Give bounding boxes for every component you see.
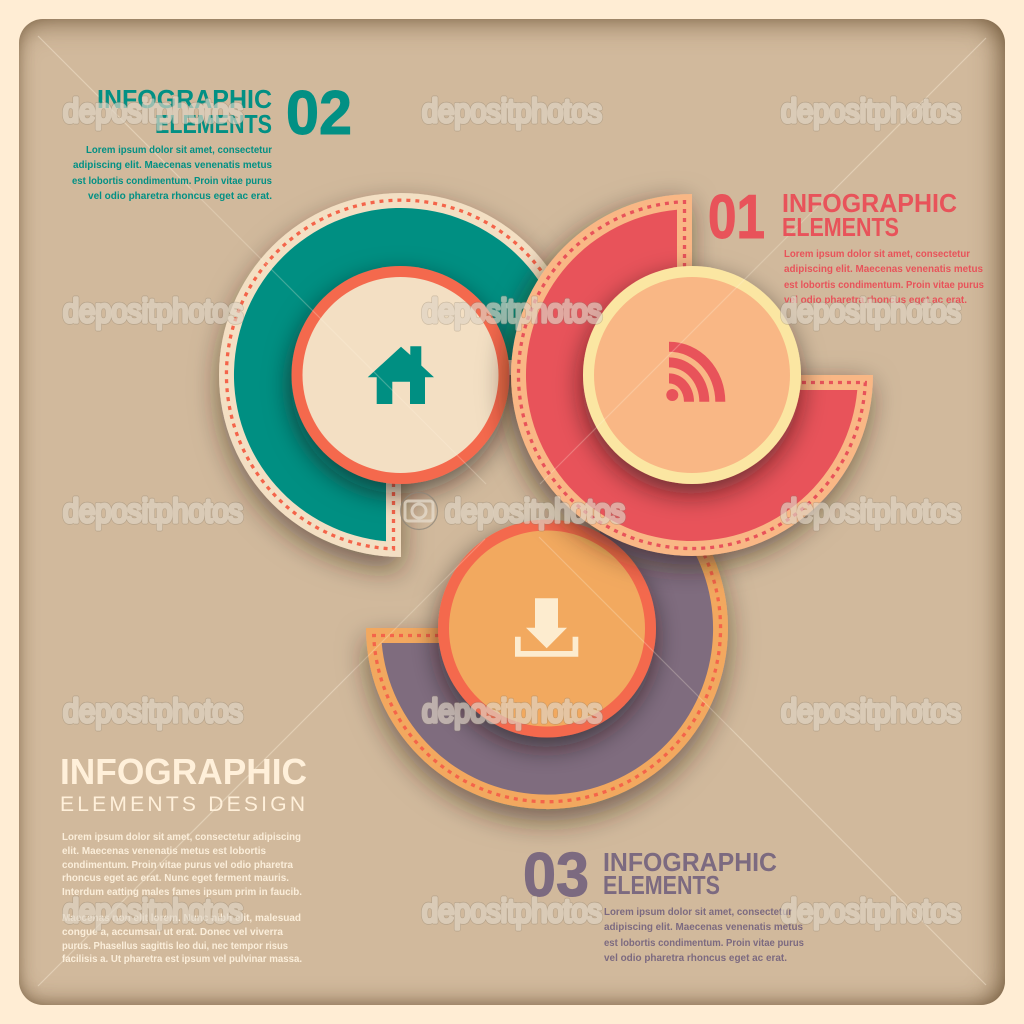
paragraph 01: adipiscing elit. Maecenas venenatis metus (784, 264, 983, 275)
paragraph 02: adipiscing elit. Maecenas venenatis metus (73, 160, 272, 171)
intro paragraph: rhoncus eget ac erat. Nunc eget ferment mauris. (62, 873, 289, 884)
watermark grid: depositphotos (781, 492, 961, 529)
watermark grid: depositphotos (781, 892, 961, 929)
watermark grid: depositphotos (422, 692, 602, 729)
intro paragraph: purus. Phasellus sagittis leo dui, nec tempor risus (62, 941, 288, 952)
paragraph 03: vel odio pharetra rhoncus eget ac erat. (604, 953, 787, 964)
watermark grid: depositphotos (781, 692, 961, 729)
watermark grid: depositphotos (63, 92, 243, 129)
section 01: red ring with RSS icon (511, 194, 873, 556)
watermark grid: depositphotos (422, 292, 602, 329)
title: INFOGRAPHIC (60, 751, 307, 792)
heading 01: INFOGRAPHIC (782, 188, 957, 218)
purple ring stitching (374, 463, 721, 802)
purple ring band (366, 455, 728, 809)
heading 02 (97, 84, 272, 139)
paragraph 03: adipiscing elit. Maecenas venenatis metus (604, 922, 803, 933)
paragraph 01: est lobortis condimentum. Proin vitae purus (784, 280, 984, 291)
decorative diagonal lines over shapes (190, 188, 830, 728)
icon: home (368, 346, 434, 404)
heading 03: ELEMENTS (603, 870, 720, 900)
section 03: purple ring with download icon (366, 455, 728, 809)
watermark grid (63, 92, 961, 929)
watermark grid: depositphotos (781, 292, 961, 329)
paragraph 02: est lobortis condimentum. Proin vitae purus (72, 176, 272, 187)
subtitle: ELEMENTS DESIGN (60, 793, 305, 816)
section 02: teal ring with home icon (219, 193, 583, 557)
paragraph 01: vel odio pharetra rhoncus eget ac erat. (784, 295, 967, 306)
watermark grid: depositphotos (781, 92, 961, 129)
watermark grid: depositphotos (422, 92, 602, 129)
watermark grid: depositphotos (422, 892, 602, 929)
text block 01 (708, 183, 984, 306)
watermark grid: depositphotos (422, 692, 602, 729)
main title block (60, 751, 307, 965)
intro paragraph: condimentum. Proin vitae purus vel odio pharetra (62, 860, 293, 871)
paragraph 01: Lorem ipsum dolor sit amet, consectetur (784, 249, 970, 260)
watermark grid: depositphotos (445, 492, 625, 529)
watermark grid: depositphotos (781, 92, 961, 129)
heading 02: ELEMENTS (155, 109, 272, 139)
intro paragraph: Lorem ipsum dolor sit amet, consectetur adipiscing (62, 832, 301, 843)
watermark grid: depositphotos (63, 92, 243, 129)
number 01: 01 (708, 183, 765, 252)
watermark grid: depositphotos (63, 492, 243, 529)
intro paragraph: elit. Maecenas venenatis metus est lobortis (62, 846, 266, 857)
icon: watermark camera (400, 492, 438, 530)
watermark grid: depositphotos (63, 892, 243, 929)
intro paragraph: congue a, accumsan ut erat. Donec vel viverra (62, 927, 283, 938)
heading 01: ELEMENTS (782, 212, 899, 242)
intro paragraph: Interdum eatting males fames ipsum prim in faucib. (62, 887, 302, 898)
heading 01 (782, 188, 957, 242)
watermark grid: depositphotos (781, 292, 961, 329)
paragraph 02: vel odio pharetra rhoncus eget ac erat. (88, 191, 272, 202)
paragraph 02: Lorem ipsum dolor sit amet, consectetur (86, 145, 272, 156)
intro paragraph: Maecenas non elit lorem. Nunc nibh elit, malesuad (62, 913, 301, 924)
watermark grid: depositphotos (445, 492, 625, 529)
icon: RSS (666, 342, 725, 402)
paragraph 03 (604, 907, 804, 964)
intro paragraph (62, 832, 302, 965)
red ring stitching (518, 202, 865, 549)
watermark grid: depositphotos (63, 692, 243, 729)
purple inner circle (438, 520, 656, 738)
watermark grid: depositphotos (781, 492, 961, 529)
watermark grid: depositphotos (422, 292, 602, 329)
icon: download (515, 598, 578, 657)
intro paragraph: facilisis a. Ut pharetra est ipsum vel pulvinar massa. (62, 954, 302, 965)
teal inner circle (292, 266, 510, 484)
watermark grid: depositphotos (63, 692, 243, 729)
purple ring fill (382, 471, 713, 795)
watermark grid: depositphotos (63, 292, 243, 329)
watermark grid: depositphotos (63, 492, 243, 529)
teal ring stitching (226, 200, 575, 549)
number 03: 03 (523, 841, 589, 910)
paragraph 03: est lobortis condimentum. Proin vitae purus (604, 938, 804, 949)
watermark grid: depositphotos (781, 692, 961, 729)
red inner circle (583, 266, 801, 484)
watermark grid: depositphotos (63, 292, 243, 329)
paragraph 03: Lorem ipsum dolor sit amet, consectetur (604, 907, 792, 918)
watermark grid: depositphotos (781, 892, 961, 929)
red ring fill (526, 210, 857, 541)
watermark grid: depositphotos (422, 892, 602, 929)
teal ring band (219, 193, 583, 557)
teal ring fill (234, 208, 567, 541)
text block 03 (523, 841, 804, 964)
watermark grid: depositphotos (422, 92, 602, 129)
heading 03: INFOGRAPHIC (603, 847, 777, 877)
paragraph 02 (72, 145, 272, 202)
paragraph 01 (784, 249, 984, 306)
watermark grid: depositphotos (63, 892, 243, 929)
heading 02: INFOGRAPHIC (97, 84, 272, 114)
red ring band (511, 194, 873, 556)
heading 03 (603, 847, 777, 900)
number 02: 02 (286, 79, 352, 148)
text block 02 (72, 79, 352, 202)
